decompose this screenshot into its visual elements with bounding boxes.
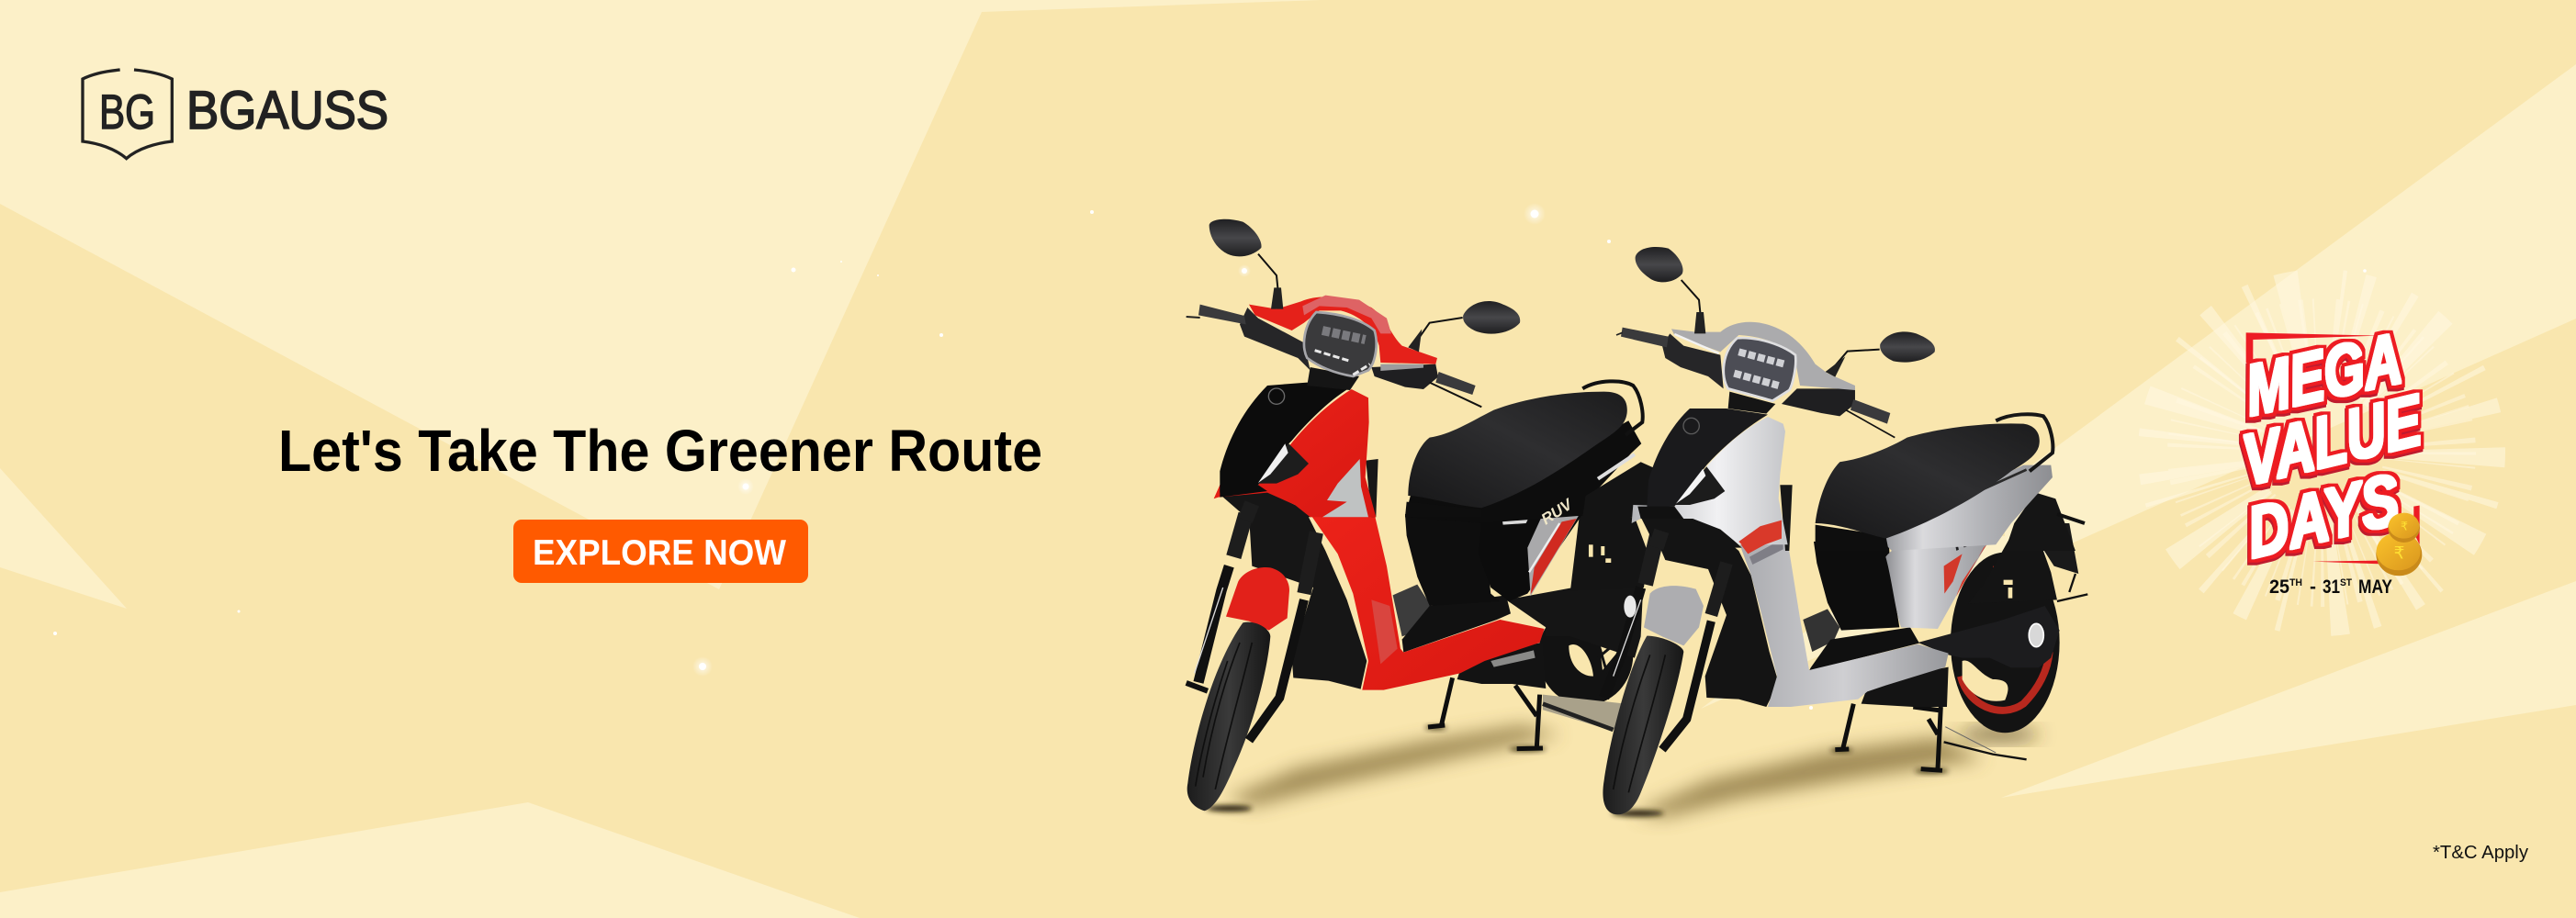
wheel cover bbox=[1918, 606, 2060, 667]
right handle bbox=[1782, 388, 1895, 438]
heading: Let's Take The Greener Route bbox=[278, 418, 1042, 484]
rear dark panel bbox=[1405, 420, 1641, 523]
upper half bbox=[1187, 219, 1655, 523]
front wheel bbox=[1187, 622, 1270, 811]
burst rays bbox=[2198, 329, 2446, 577]
suspension bbox=[1570, 514, 1648, 590]
model label: RUV bbox=[1951, 522, 1995, 555]
bar under panel bbox=[1637, 507, 1683, 519]
badge: mega value days bbox=[2198, 317, 2446, 598]
neck bbox=[1728, 392, 1775, 414]
inner leg shield bbox=[1656, 532, 1779, 707]
cowl bbox=[1671, 322, 1855, 390]
headline text bbox=[2237, 317, 2428, 574]
side stand bbox=[1945, 727, 1996, 753]
rear wheel bbox=[1951, 553, 2060, 733]
floor bbox=[1809, 627, 1919, 671]
floor mat bbox=[1393, 585, 1431, 636]
button: explore now bbox=[513, 520, 808, 583]
inner leg shield bbox=[1249, 514, 1367, 689]
silver rail bbox=[1880, 465, 2053, 551]
back piece bbox=[1366, 459, 1378, 517]
rear suspension bbox=[1968, 530, 2057, 603]
date: - bbox=[2310, 577, 2316, 598]
floor bbox=[1402, 595, 1511, 653]
handlebar centre bbox=[1240, 308, 1310, 370]
back piece bbox=[1780, 485, 1793, 551]
headline text: VALUE bbox=[2237, 378, 2428, 501]
front decal bbox=[1738, 521, 1782, 551]
headlight bbox=[1304, 312, 1377, 376]
fork highlight bbox=[1624, 596, 1637, 618]
centre stand bbox=[1428, 677, 1543, 749]
black upper panel bbox=[1647, 409, 1768, 508]
cowl bbox=[1249, 297, 1437, 364]
fender bbox=[1644, 586, 1704, 645]
floor mat bbox=[1803, 609, 1839, 652]
body reflection bbox=[1371, 599, 1398, 664]
seat base bbox=[1816, 525, 1889, 551]
stand wedge bbox=[1543, 695, 1625, 730]
side vent bbox=[1258, 443, 1309, 484]
rear mechanics bbox=[2005, 493, 2075, 551]
left grip bbox=[1616, 328, 1669, 347]
grab rail bbox=[1996, 414, 2053, 471]
grab rail bbox=[1582, 381, 1643, 435]
emblem bbox=[1683, 418, 1699, 434]
lower half bbox=[1187, 514, 1648, 812]
fender bbox=[1226, 567, 1289, 631]
belly bbox=[1457, 643, 1546, 688]
hub bbox=[2029, 623, 2043, 647]
belly bbox=[1862, 667, 1949, 707]
ground shadow bbox=[1612, 730, 2039, 817]
scooter: red bbox=[1187, 219, 1655, 812]
forks bbox=[1187, 514, 1316, 741]
rear silver panel bbox=[1885, 523, 2002, 629]
date bbox=[2269, 577, 2392, 598]
right handle bbox=[1371, 364, 1481, 407]
red body panel bbox=[1214, 389, 1376, 517]
date: TH bbox=[2289, 577, 2302, 588]
chassis strip bbox=[1598, 454, 1635, 479]
date: 25 bbox=[2269, 577, 2289, 598]
rear wheel bbox=[1538, 604, 1633, 705]
ground shadow bbox=[1206, 725, 1561, 812]
inner shield top bbox=[1641, 517, 1742, 548]
model label: RUV bbox=[1538, 495, 1577, 528]
silver body panel bbox=[1632, 417, 1788, 544]
side vent bbox=[1674, 466, 1725, 505]
rear graphic bbox=[1527, 514, 1580, 596]
left grip bbox=[1187, 305, 1246, 324]
mirrors bbox=[1209, 219, 1520, 352]
date: 31 bbox=[2323, 577, 2340, 598]
logo mark text: BG bbox=[99, 85, 155, 140]
headline text: MEGA bbox=[2242, 317, 2406, 431]
coins: ₹ bbox=[2394, 543, 2405, 562]
rear decal bbox=[1944, 544, 1986, 597]
headlight bbox=[1724, 338, 1795, 401]
scooter: silver bbox=[1603, 247, 2087, 817]
red lower body bbox=[1310, 514, 1545, 690]
seat bbox=[1816, 423, 2040, 539]
date: MAY bbox=[2358, 577, 2392, 598]
black upper panel bbox=[1220, 383, 1348, 493]
upper half bbox=[1616, 247, 2085, 551]
fork spring top bbox=[1656, 531, 1661, 548]
max badge bbox=[1738, 523, 1783, 565]
seat bbox=[1408, 392, 1627, 508]
lower half bbox=[1603, 522, 2087, 817]
storage bbox=[1814, 539, 1899, 631]
date: ST bbox=[2340, 577, 2352, 588]
front wheel bbox=[1603, 636, 1683, 814]
silver lower body bbox=[1738, 542, 1949, 707]
glossy panel bbox=[1479, 514, 1582, 601]
storage bbox=[1405, 514, 1500, 606]
mirrors bbox=[1636, 247, 1935, 377]
rack bbox=[2057, 574, 2087, 601]
logo wordmark: BGAUSS bbox=[186, 81, 388, 140]
logo: BGAUSS bbox=[83, 70, 388, 159]
handlebar centre bbox=[1662, 333, 1724, 388]
centre stand bbox=[1835, 704, 1942, 770]
headline text: DAYS bbox=[2242, 457, 2404, 574]
coins bbox=[2376, 513, 2422, 576]
fork spring top bbox=[1245, 503, 1252, 521]
button: explore now: EXPLORE NOW bbox=[533, 533, 786, 573]
terms note: *T&C Apply bbox=[2433, 843, 2528, 863]
neck bbox=[1307, 367, 1359, 390]
tail fender bbox=[2027, 523, 2078, 574]
icon: shield bbox=[83, 70, 172, 159]
seat base bbox=[1405, 502, 1481, 517]
red bracket bbox=[2246, 332, 2420, 564]
coins: ₹ bbox=[2401, 521, 2408, 533]
inner shield top bbox=[1221, 491, 1311, 517]
sparkles bbox=[53, 203, 2367, 710]
bar under panel bbox=[1220, 485, 1267, 498]
rear mechanics bbox=[1506, 572, 1644, 658]
decal bbox=[1322, 459, 1368, 517]
emblem bbox=[1268, 388, 1285, 404]
forks bbox=[1604, 532, 1727, 750]
